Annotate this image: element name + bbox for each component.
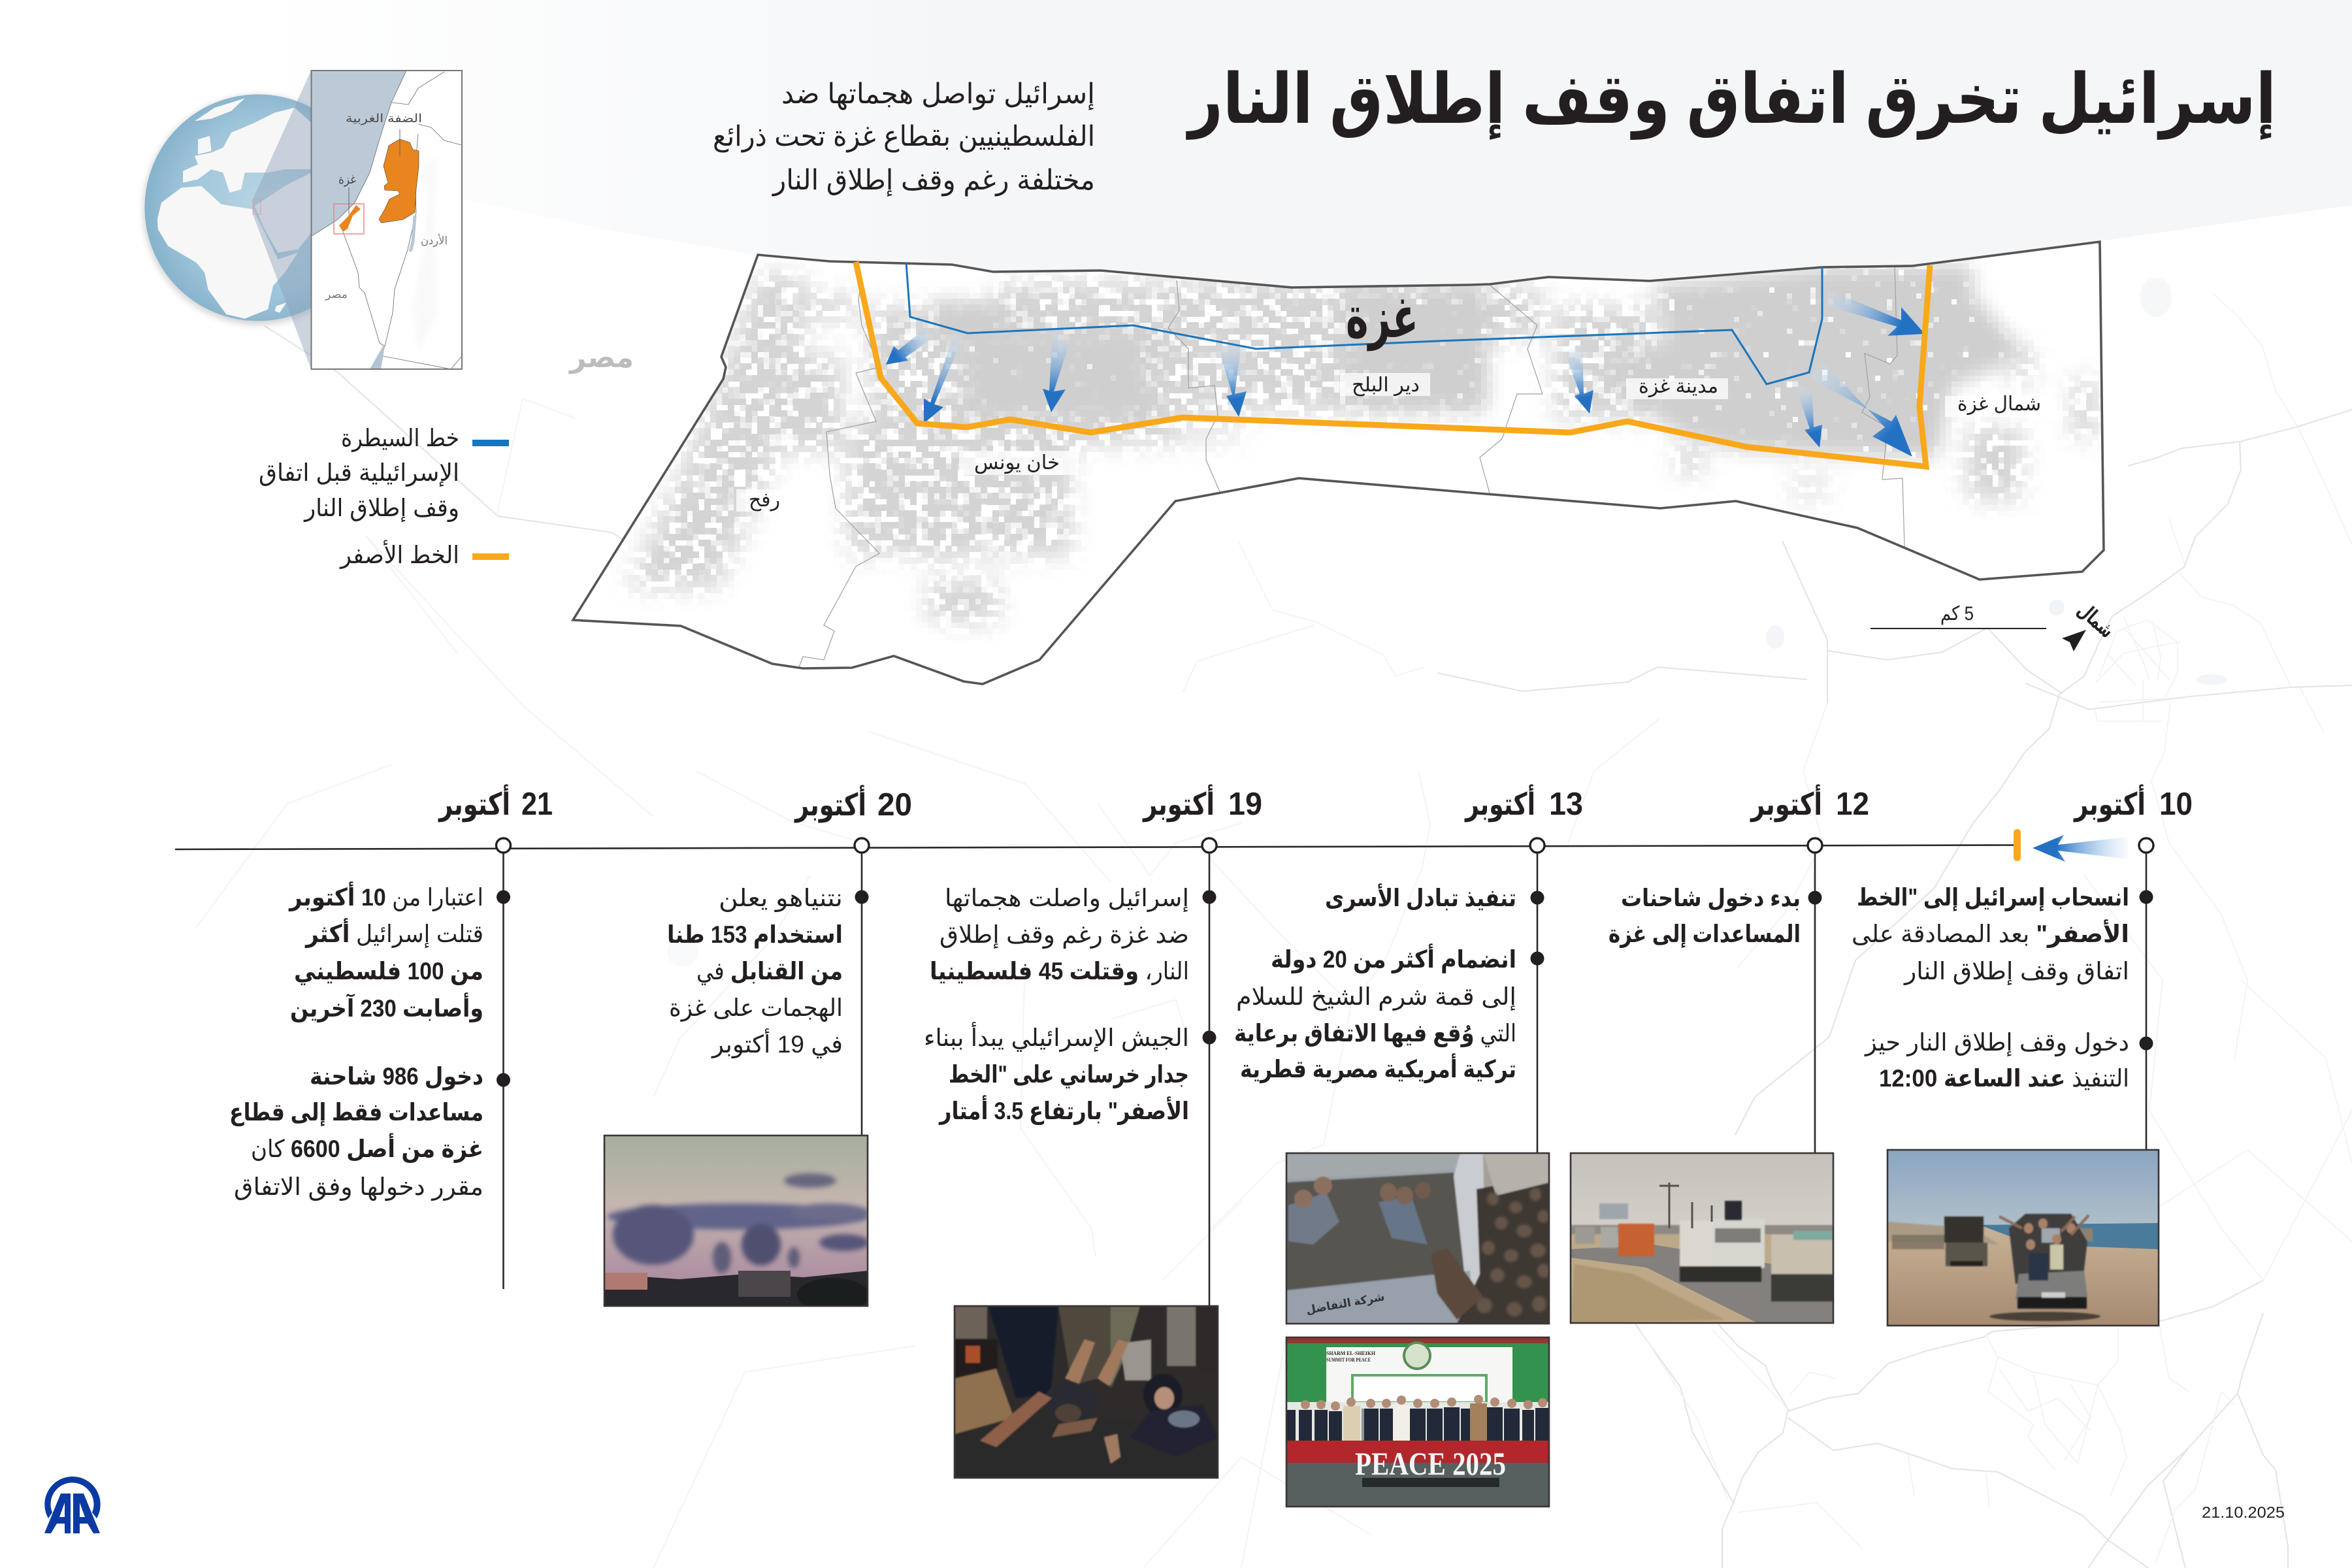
photo: mourners <box>955 1306 1218 1478</box>
text: مساعدات فقط إلى قطاع <box>229 1099 483 1126</box>
event: 12 october <box>1571 784 1869 1323</box>
text: تنفيذ تبادل الأسرى <box>1325 883 1516 912</box>
text: بدء دخول شاحنات <box>1621 885 1801 912</box>
text: الأصفر" بارتفاع 3.5 أمتار <box>938 1095 1189 1125</box>
egypt label inset: مصر <box>325 288 348 301</box>
date: أكتوبر <box>438 784 510 823</box>
date <box>1750 784 1869 823</box>
text: إسرائيل واصلت هجماتها <box>945 885 1189 912</box>
date: 21 <box>521 787 553 822</box>
urban areas <box>627 265 2097 622</box>
text: من القنابل في <box>696 958 843 985</box>
text: دخول وقف إطلاق النار حيز <box>1864 1029 2129 1056</box>
text: اتفاق وقف إطلاق النار <box>1903 958 2129 985</box>
subtitle: مختلفة رغم وقف إطلاق النار <box>772 165 1095 197</box>
label: khan younis: خان يونس <box>974 452 1060 474</box>
text <box>924 885 1189 1125</box>
text: استخدام 153 طنا <box>667 921 843 949</box>
subtitle <box>713 78 1095 197</box>
inset sea <box>311 71 406 237</box>
gaza border <box>573 242 2104 684</box>
label: deir al-balah: دير البلح <box>1352 374 1420 397</box>
timeline axis <box>175 845 2017 849</box>
backdrop text: SHARM EL-SHEIKH <box>1326 1350 1376 1356</box>
text: الأصفر" بعد المصادقة على <box>1852 919 2129 948</box>
date <box>794 785 912 823</box>
inset locator map <box>311 71 462 369</box>
text: اعتبارا من 10 أكتوبر <box>288 881 483 911</box>
text <box>1234 883 1516 1083</box>
photo: smoke over gaza <box>604 1135 869 1312</box>
text: غزة من أصل 6600 كان <box>251 1133 483 1163</box>
text: نتنياهو يعلن <box>719 885 843 912</box>
event sign: PEACE 2025 <box>1355 1445 1506 1482</box>
egypt label: مصر <box>568 342 634 374</box>
text: وأصابت 230 آخرين <box>290 992 483 1022</box>
district boundaries <box>799 267 1904 667</box>
movement arrows <box>886 289 1925 457</box>
legend: blue control line <box>472 440 509 446</box>
north arrow <box>2062 598 2119 651</box>
date: أكتوبر <box>1142 784 1215 823</box>
text <box>1852 884 2129 1092</box>
gaza strip map <box>573 242 2104 684</box>
subtitle: الفلسطينيين بقطاع غزة تحت ذرائع <box>713 121 1095 153</box>
blue control line <box>906 263 1822 384</box>
label: khan younis <box>959 451 1079 475</box>
date: 12 <box>1836 787 1869 822</box>
event: 13 october <box>1234 784 1583 1507</box>
event: 21 october <box>229 784 553 1289</box>
projection cone to inset <box>253 71 311 369</box>
photo: prisoner exchange <box>1286 1153 1550 1324</box>
date stamp: 21.10.2025 <box>2202 1504 2285 1522</box>
gaza shape <box>339 205 361 232</box>
text: تركية أمريكية مصرية قطرية <box>1240 1053 1516 1083</box>
text: التنفيذ عند الساعة 12:00 <box>1879 1065 2129 1092</box>
legend: وقف إطلاق النار <box>303 495 459 522</box>
gaza label inset: غزة <box>338 173 356 187</box>
scale bar: 5 كم <box>1940 603 1974 625</box>
label: deir al-balah <box>1340 373 1430 397</box>
text: الهجمات على غزة <box>669 994 843 1022</box>
date: 10 <box>2159 787 2193 822</box>
text: جدار خرساني على "الخط <box>949 1061 1189 1088</box>
jordan label: الأردن <box>421 234 448 247</box>
west bank shape <box>379 139 419 223</box>
text: النار، وقتلت 45 فلسطينيا <box>930 958 1189 985</box>
date: أكتوبر <box>794 785 866 823</box>
logo: anadolu agency <box>44 1477 101 1533</box>
yellow line tick <box>2014 829 2021 861</box>
date <box>2073 784 2193 823</box>
photo: peace summit: SUMMIT FOR PEACE <box>1326 1357 1371 1363</box>
label: gaza city: مدينة غزة <box>1639 376 1718 397</box>
date: أكتوبر <box>2073 784 2146 823</box>
west bank label: الضفة الغربية <box>346 112 422 125</box>
date: 13 <box>1549 787 1583 822</box>
subtitle: إسرائيل تواصل هجماتها ضد <box>781 78 1095 110</box>
globe highlight rectangle <box>253 199 261 214</box>
timeline arrow <box>2033 835 2128 862</box>
legend: خط السيطرة <box>341 425 459 452</box>
globe <box>140 93 311 328</box>
event: 10 october <box>1852 784 2193 1326</box>
text <box>1609 885 1801 948</box>
photo: returning convoy <box>1887 1150 2159 1326</box>
text: انسحاب إسرائيل إلى "الخط <box>1857 884 2129 911</box>
text <box>667 885 843 1058</box>
text: من 100 فلسطيني <box>294 958 483 985</box>
background road network <box>196 278 2352 1568</box>
label: north gaza: شمال غزة <box>1957 393 2041 415</box>
label: rafah: رفح <box>749 489 780 512</box>
text: دخول 986 شاحنة <box>310 1063 483 1090</box>
date: 19 <box>1228 787 1262 822</box>
date <box>1142 784 1262 823</box>
date: 20 <box>877 787 912 823</box>
bus lettering: شركة التفاضل <box>1305 1290 1386 1317</box>
text: الجيش الإسرائيلي يبدأ ببناء <box>924 1022 1189 1052</box>
text: التي وُقع فيها الاتفاق برعاية <box>1234 1020 1516 1047</box>
text: ضد غزة رغم وقف إطلاق <box>939 921 1189 949</box>
text: إلى قمة شرم الشيخ للسلام <box>1236 983 1516 1011</box>
date <box>1464 784 1583 823</box>
event: 20 october <box>604 785 912 1312</box>
legend: yellow line <box>472 553 509 560</box>
text: المساعدات إلى غزة <box>1609 921 1801 948</box>
photo: aid trucks <box>1571 1153 1833 1323</box>
text: قتلت إسرائيل أكثر <box>304 918 483 948</box>
date: أكتوبر <box>1464 784 1535 823</box>
legend <box>259 425 509 569</box>
gaza highlight box <box>334 204 364 234</box>
yellow line <box>856 262 1930 466</box>
sea band <box>258 0 2352 287</box>
text: انضمام أكثر من 20 دولة <box>1271 943 1516 974</box>
text: مقرر دخولها وفق الاتفاق <box>234 1173 483 1201</box>
text <box>229 881 483 1201</box>
date: أكتوبر <box>1750 784 1822 823</box>
photo: peace summit <box>1286 1337 1550 1507</box>
label: gaza: غزة <box>1346 285 1418 351</box>
label: rafah <box>736 489 794 512</box>
legend: الخط الأصفر <box>339 540 459 569</box>
north arrow: شمال <box>2073 598 2119 642</box>
text: في 19 أكتوبر <box>711 1028 843 1058</box>
event: 19 october <box>924 784 1262 1478</box>
legend: الإسرائيلية قبل اتفاق <box>259 459 459 487</box>
